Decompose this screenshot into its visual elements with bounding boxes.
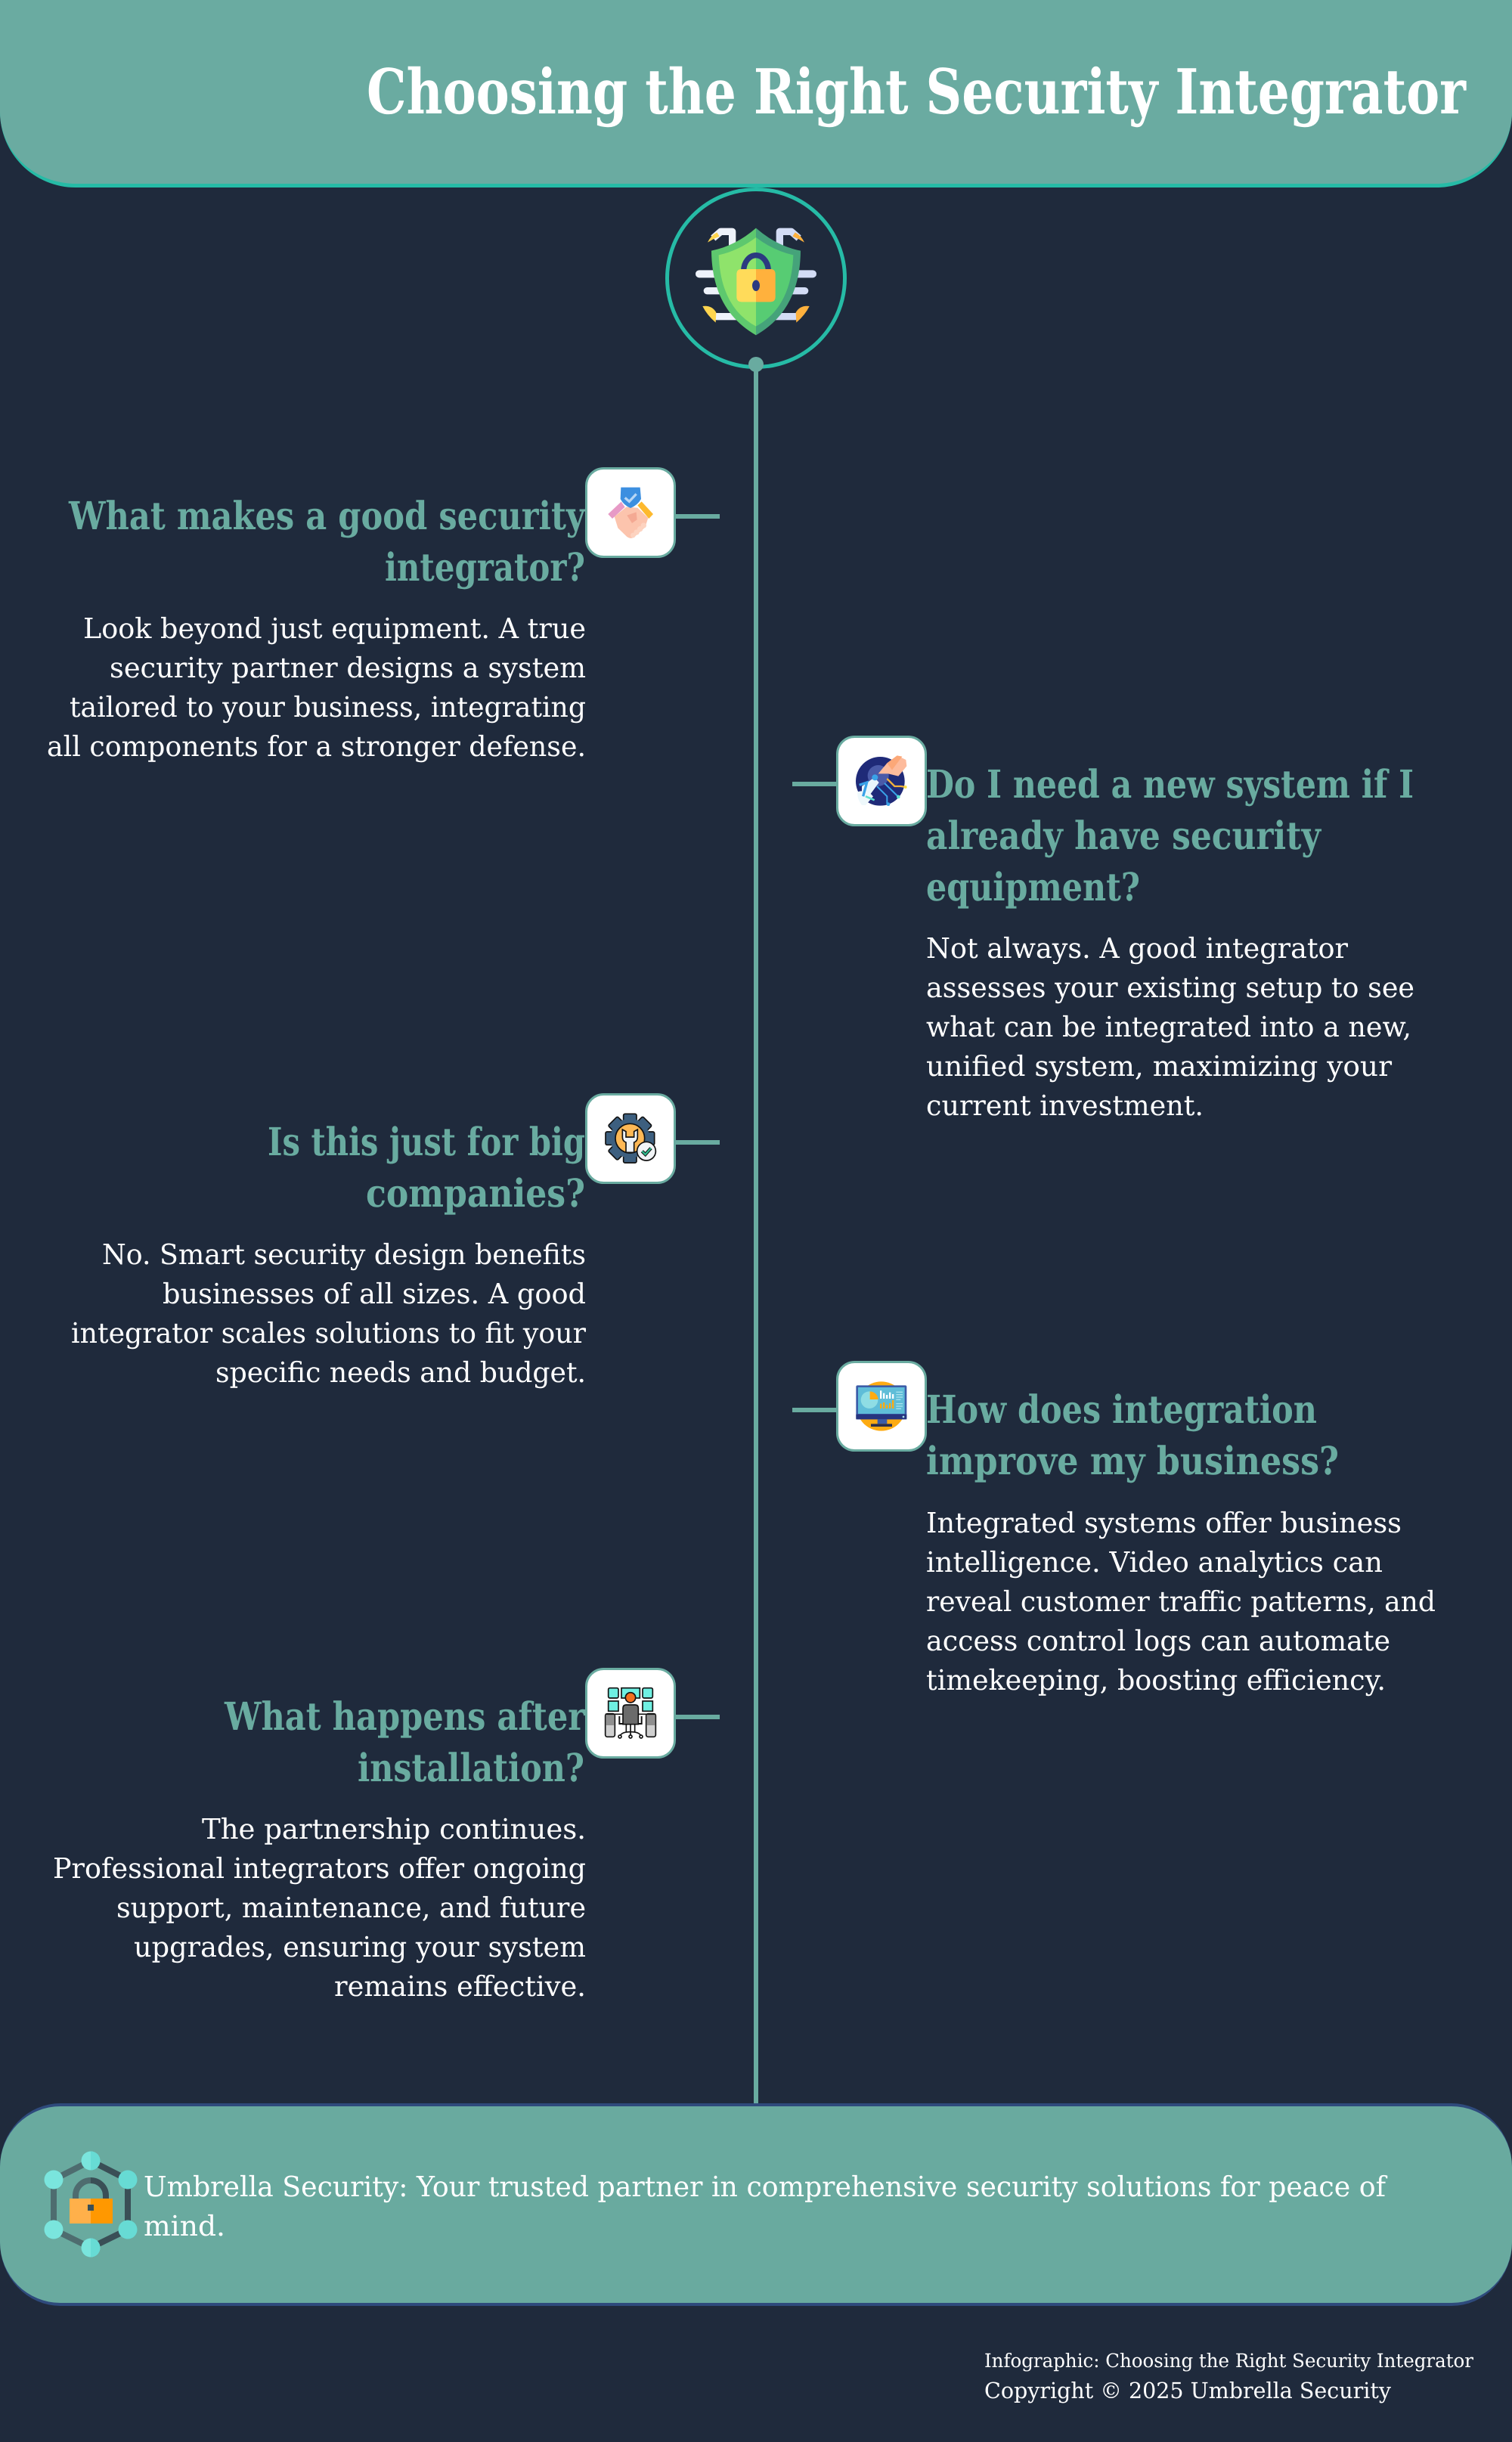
panel: what happens after installation xyxy=(53,1669,720,2003)
connector xyxy=(676,1140,720,1145)
panel: how does integration improve my business xyxy=(792,1362,1436,1697)
footer message: mind. xyxy=(144,2210,225,2242)
heading: What makes a good security xyxy=(68,494,586,539)
heading: companies? xyxy=(366,1171,585,1216)
heading: integrator? xyxy=(385,545,585,590)
credits: Copyright © 2025 Umbrella Security xyxy=(984,2378,1392,2403)
connector xyxy=(676,514,720,519)
connector xyxy=(792,782,837,786)
heading: installation? xyxy=(358,1746,584,1791)
icon: handshake with shield xyxy=(587,469,674,556)
credits xyxy=(984,2350,1473,2403)
body text xyxy=(926,1507,1436,1697)
panel: do I need a new system xyxy=(792,736,1414,1122)
body text: Integrated systems offer business xyxy=(926,1507,1402,1539)
heading xyxy=(68,494,586,590)
heading: equipment? xyxy=(926,865,1140,910)
body text: assesses your existing setup to see xyxy=(926,972,1414,1004)
footer message: Umbrella Security: Your trusted partner in comprehensive security solutions for peace of xyxy=(144,2171,1387,2203)
icon: operator at monitoring station xyxy=(587,1669,674,1757)
body text xyxy=(47,612,586,763)
heading: Do I need a new system if I xyxy=(926,762,1414,807)
body text: Professional integrators offer ongoing xyxy=(53,1852,586,1885)
body text xyxy=(926,932,1414,1122)
heading xyxy=(926,762,1414,910)
body text: current investment. xyxy=(926,1089,1204,1122)
body text: businesses of all sizes. A good xyxy=(163,1278,586,1310)
body text: all components for a stronger defense. xyxy=(47,730,586,763)
body text: access control logs can automate xyxy=(926,1625,1390,1657)
body text: unified system, maximizing your xyxy=(926,1050,1392,1083)
panel: what makes a good security integrator xyxy=(47,469,720,763)
heading: What happens after xyxy=(224,1694,586,1740)
heading: How does integration xyxy=(926,1387,1317,1433)
body text: Not always. A good integrator xyxy=(926,932,1348,965)
body text: security partner designs a system xyxy=(110,652,586,684)
icon: shield with padlock in circle xyxy=(667,189,845,372)
heading xyxy=(926,1387,1339,1484)
heading xyxy=(224,1694,586,1791)
icon: network padlock xyxy=(44,2152,138,2258)
body text: No. Smart security design benefits xyxy=(102,1238,586,1271)
heading: improve my business? xyxy=(926,1439,1339,1484)
header banner xyxy=(0,0,1512,187)
heading: already have security xyxy=(926,813,1321,859)
body text: intelligence. Video analytics can xyxy=(926,1546,1383,1579)
body text: what can be integrated into a new, xyxy=(926,1011,1411,1043)
panel: is this just for big companies xyxy=(71,1095,720,1389)
body text: specific needs and budget. xyxy=(215,1356,586,1389)
icon: monitor dashboard xyxy=(838,1362,925,1450)
body text: remains effective. xyxy=(334,1970,586,2003)
timeline line xyxy=(754,364,758,2106)
credits: Infographic: Choosing the Right Security Integrator xyxy=(984,2350,1473,2372)
body text: The partnership continues. xyxy=(202,1813,586,1845)
icon: finger on circuit xyxy=(838,736,925,826)
heading: Is this just for big xyxy=(268,1120,585,1165)
body text: reveal customer traffic patterns, and xyxy=(926,1585,1436,1618)
connector xyxy=(676,1715,720,1719)
body text: support, maintenance, and future xyxy=(116,1892,586,1924)
body text: tailored to your business, integrating xyxy=(70,691,586,724)
body text: upgrades, ensuring your system xyxy=(134,1931,586,1963)
footer message xyxy=(144,2171,1387,2242)
icon: gear with wrench and check xyxy=(587,1095,674,1182)
heading xyxy=(268,1120,585,1216)
body text: integrator scales solutions to fit your xyxy=(71,1317,586,1350)
body text: Look beyond just equipment. A true xyxy=(83,612,586,645)
footer banner xyxy=(0,2103,1512,2306)
body text xyxy=(71,1238,586,1389)
connector xyxy=(792,1408,837,1412)
body text: timekeeping, boosting efficiency. xyxy=(926,1664,1386,1697)
body text xyxy=(53,1813,586,2003)
